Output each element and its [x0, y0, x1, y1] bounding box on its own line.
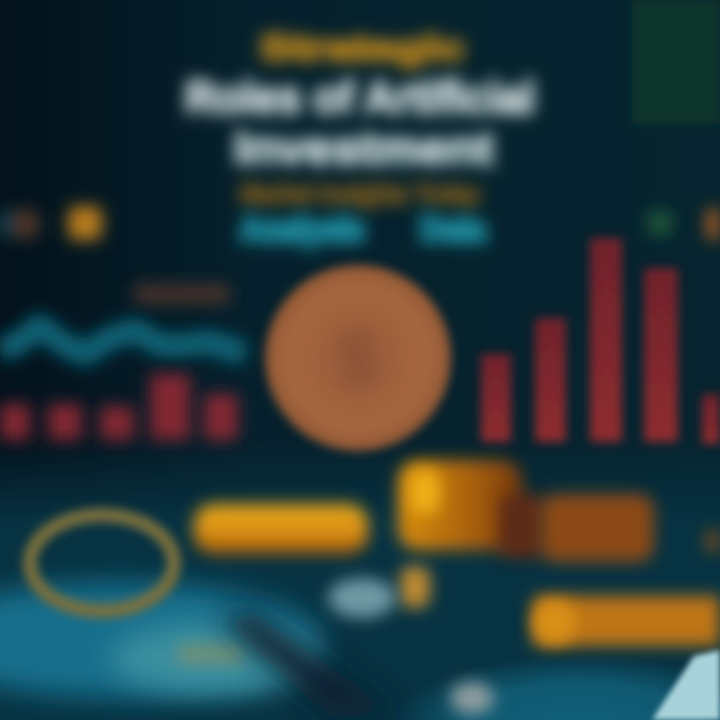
- gavel head highlight: [410, 470, 440, 514]
- light reflection centre: [328, 578, 396, 618]
- magnifying glass ring: [30, 515, 174, 611]
- small gold accent right: [706, 530, 720, 552]
- gavel head right: [540, 494, 654, 562]
- header text block: [185, 27, 535, 249]
- right red bar chart: [481, 238, 720, 444]
- light panel bottom right: [652, 650, 720, 720]
- subtitle orange: Market Insights Today: [240, 178, 480, 209]
- icons: right dots: [648, 208, 720, 240]
- left line chart: [0, 326, 245, 354]
- lower gold bar: [534, 596, 720, 646]
- icons: left dots: [0, 206, 102, 240]
- background panel: green top right: [632, 0, 720, 124]
- heading: orange kicker: Strategic: [260, 27, 464, 68]
- label above left chart: [134, 284, 230, 304]
- coin symbol: $: [336, 314, 380, 403]
- gold bar: gavel handle: [194, 504, 368, 554]
- gavel head shadow band: [500, 494, 544, 558]
- title line 2: Investment: [234, 122, 494, 174]
- lower gold bar end cap: [532, 600, 576, 644]
- light reflection bottom: [450, 682, 494, 714]
- subtitle teal right: Data: [420, 208, 486, 249]
- gavel stem: [400, 566, 430, 608]
- coin: [265, 265, 451, 451]
- title line 1: Roles of Artificial: [185, 71, 535, 123]
- gavel head left: [398, 460, 522, 550]
- water / teal base area: [0, 582, 720, 720]
- subtitle teal left: Analysis: [240, 208, 364, 249]
- left red bar chart: [0, 374, 238, 440]
